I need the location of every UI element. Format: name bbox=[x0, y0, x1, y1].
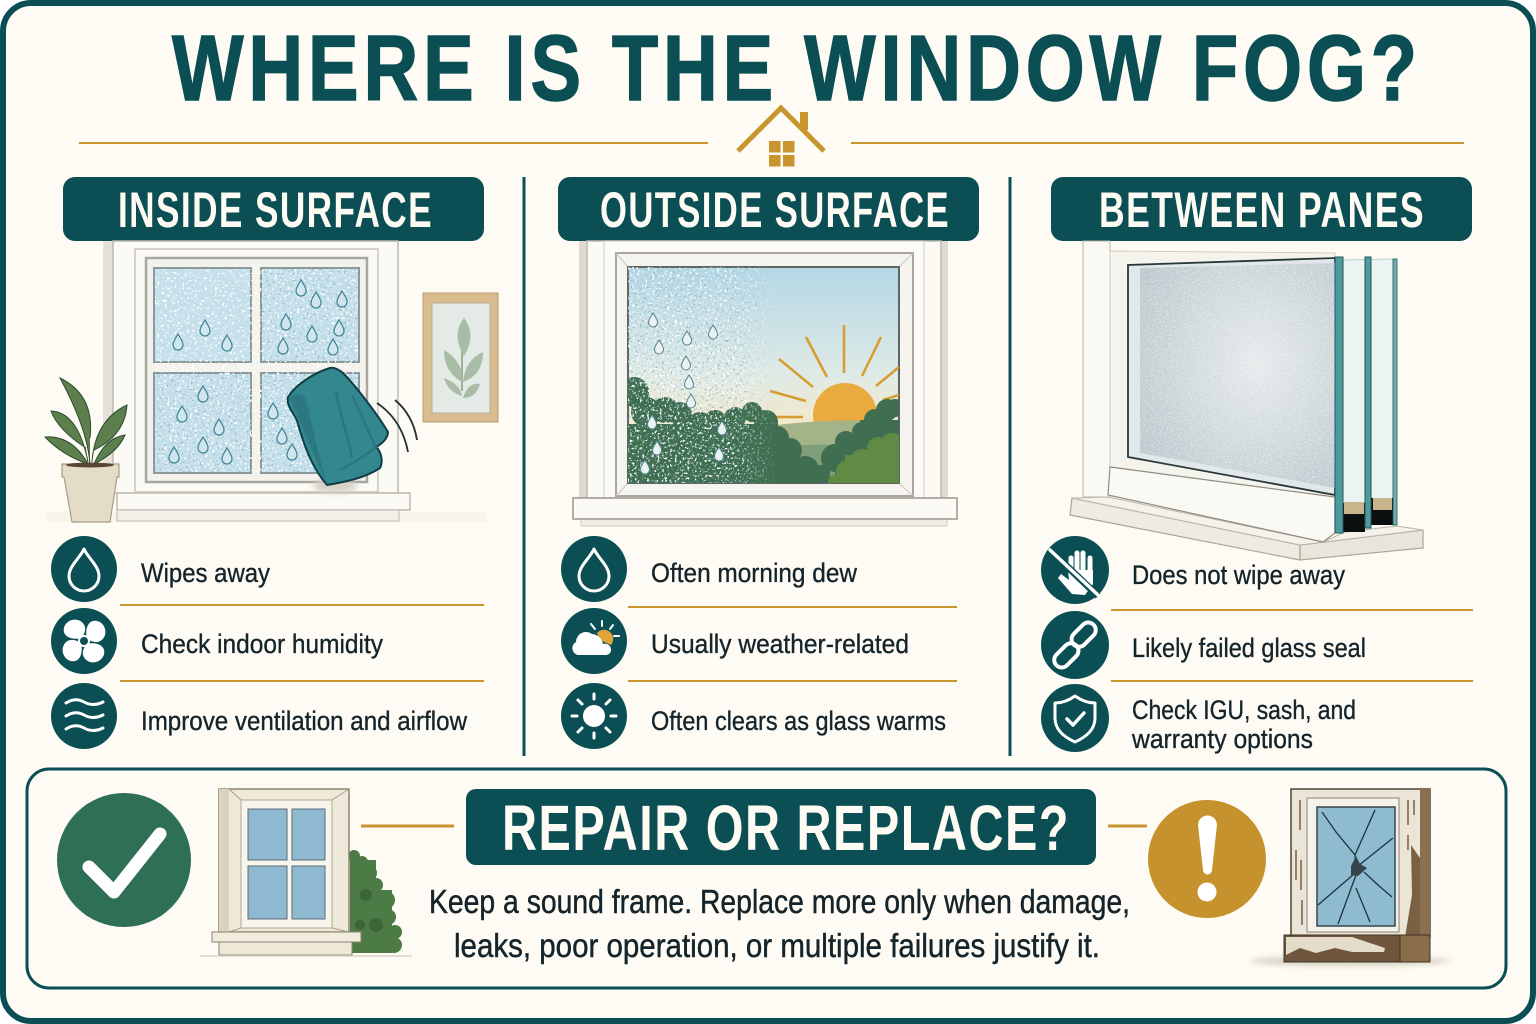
illustration: exterior window with sunrise bbox=[573, 241, 957, 526]
heading: between panes bbox=[1051, 177, 1472, 241]
panel: repair or replace bbox=[27, 769, 1506, 988]
illustration: insulated glass unit cross-section bbox=[1070, 241, 1423, 560]
text: repair advice: leaks, poor operation, or multiple failures justify it. bbox=[454, 927, 1100, 964]
icon: framed leaf picture bbox=[423, 293, 498, 422]
icon: teal cloth wiping window bbox=[288, 368, 417, 493]
icon: green check bbox=[57, 793, 191, 927]
text: wipes away: Wipes away bbox=[141, 558, 270, 588]
icon: broken chain link bbox=[1041, 611, 1109, 679]
panel: outside surface bbox=[558, 177, 979, 749]
heading: inside surface: INSIDE SURFACE bbox=[118, 182, 433, 238]
icon: shield check bbox=[1041, 684, 1109, 752]
icon: airflow waves bbox=[51, 683, 117, 749]
icon: warning exclamation bbox=[1148, 800, 1266, 918]
connector line bbox=[361, 824, 454, 828]
column dividers bbox=[522, 177, 1012, 756]
text: repair advice bbox=[429, 883, 1130, 964]
icon: potted plant bbox=[45, 378, 127, 522]
list: outside surface tips bbox=[561, 536, 957, 749]
text: check IGU options: Check IGU, sash, and bbox=[1132, 695, 1356, 725]
heading: inside surface bbox=[63, 177, 484, 241]
list: between panes tips bbox=[1041, 536, 1473, 754]
text: check IGU options: warranty options bbox=[1131, 724, 1313, 754]
connector line bbox=[1108, 824, 1147, 828]
illustration: damaged window bbox=[1250, 789, 1450, 966]
text: improve ventilation: Improve ventilation and airflow bbox=[141, 706, 467, 736]
title divider with house icon bbox=[79, 108, 1464, 166]
icon: water drop bbox=[51, 536, 117, 602]
panel: inside surface bbox=[45, 177, 498, 749]
icon: sun bbox=[561, 683, 627, 749]
icon: no wiping hand bbox=[1041, 536, 1109, 604]
illustration: foggy interior window bbox=[46, 241, 486, 522]
text: clears as glass warms: Often clears as glass warms bbox=[651, 706, 946, 736]
text: often morning dew: Often morning dew bbox=[651, 558, 857, 588]
icon: water drop bbox=[561, 536, 627, 602]
heading: outside surface bbox=[558, 177, 979, 241]
text: repair advice: Keep a sound frame. Replace more only when damage, bbox=[429, 883, 1130, 920]
text: failed glass seal: Likely failed glass seal bbox=[1132, 633, 1366, 663]
text: weather related: Usually weather-related bbox=[651, 629, 909, 659]
text: does not wipe away: Does not wipe away bbox=[1132, 560, 1345, 590]
illustration: sound window with bush bbox=[200, 789, 412, 956]
icon: cloud and sun bbox=[561, 608, 627, 674]
text: check IGU options bbox=[1131, 695, 1356, 754]
icon: fan bbox=[51, 608, 117, 674]
panel: between panes bbox=[1041, 177, 1473, 754]
icon: house bbox=[738, 108, 824, 166]
heading: repair or replace: REPAIR OR REPLACE? bbox=[502, 792, 1070, 864]
text: check indoor humidity: Check indoor humidity bbox=[141, 629, 383, 659]
heading: outside surface: OUTSIDE SURFACE bbox=[600, 182, 950, 238]
list: inside surface tips bbox=[51, 536, 484, 749]
